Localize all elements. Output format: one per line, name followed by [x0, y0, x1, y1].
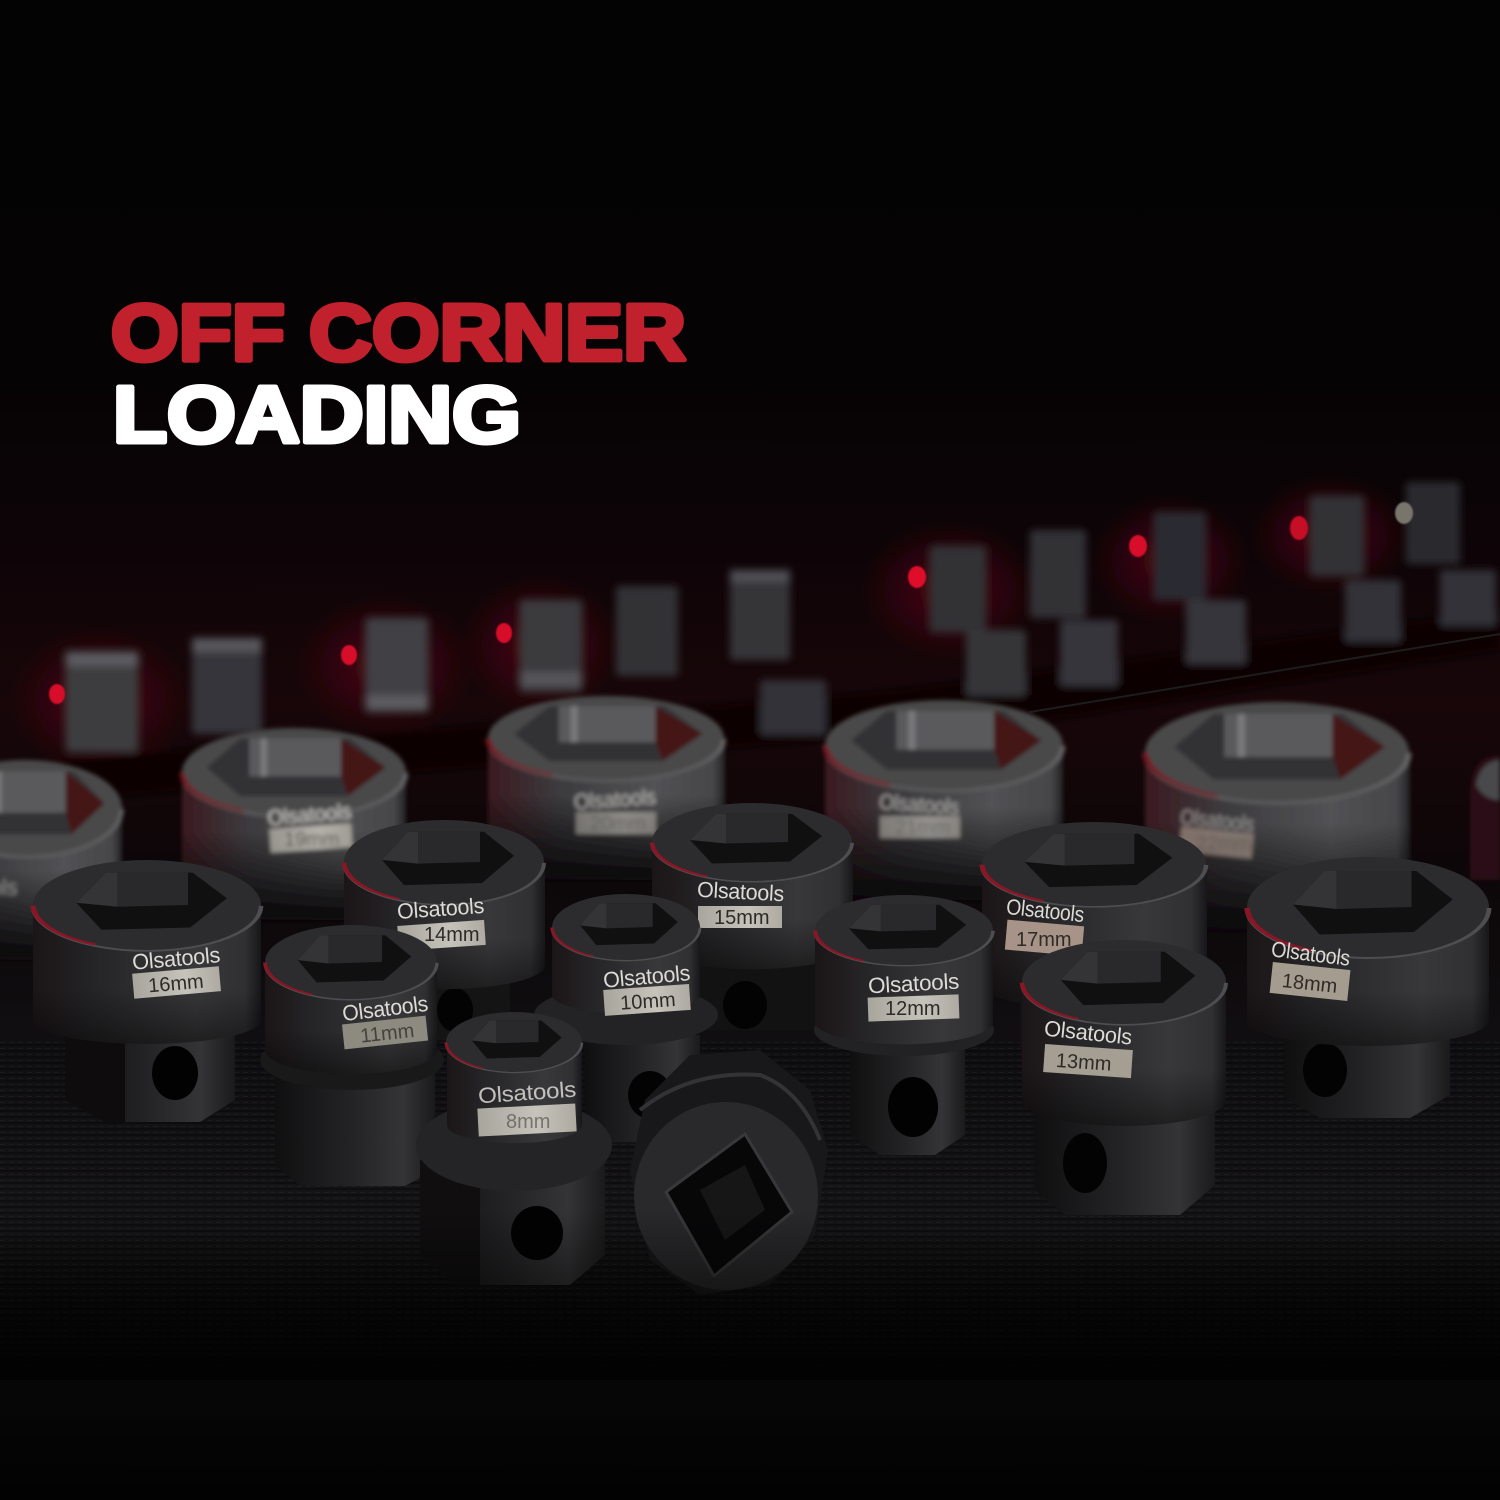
drive face — [634, 1102, 818, 1290]
socket: 15mm: Olsatools — [696, 877, 785, 906]
socket: 8mm — [416, 1012, 612, 1285]
socket: 16mm: Olsatools — [131, 942, 221, 975]
title line: red: OFF CORNER — [111, 288, 686, 377]
socket: 11mm: 11mm — [359, 1020, 415, 1048]
socket: 12mm — [814, 895, 994, 1155]
socket: 14mm: 14mm — [424, 924, 480, 946]
socket: 14mm: Olsatools — [396, 893, 485, 924]
socket: 15mm: 15mm — [714, 907, 770, 929]
blurred row of drive bits on rail — [10, 475, 1500, 800]
socket: 20mm: Olsatools — [573, 784, 657, 815]
socket: 11mm: Olsatools — [341, 991, 430, 1026]
woven table surface — [0, 1040, 1500, 1370]
socket: 17mm: Olsatools — [1005, 894, 1086, 927]
socket: 20mm — [488, 696, 725, 880]
socket: 18mm: Olsatools — [1270, 936, 1352, 971]
socket: 14mm — [344, 820, 545, 1040]
red indicator reflections on bits — [49, 502, 1413, 704]
socket: 13mm: 13mm — [1055, 1050, 1112, 1076]
hole — [511, 1206, 563, 1260]
socket: 22mm: 22mm — [1196, 833, 1252, 855]
socket: front, square drive end — [630, 1050, 828, 1295]
square recess — [666, 1134, 792, 1276]
socket: 8mm: 8mm — [506, 1111, 550, 1133]
drive base — [385, 980, 510, 1040]
socket: 18mm — [1247, 857, 1489, 1118]
shelf edge — [1030, 634, 1500, 712]
socket: 19mm — [182, 728, 406, 920]
socket: 13mm: Olsatools — [1043, 1016, 1133, 1050]
socket: 13mm — [1022, 940, 1226, 1215]
socket: 15mm — [652, 803, 853, 1030]
socket: 16mm: 16mm — [147, 971, 205, 997]
socket: 22mm — [1145, 702, 1410, 930]
socket: 22mm: Olsatools — [1179, 804, 1256, 837]
socket: 17mm: 17mm — [1016, 929, 1072, 951]
socket: 16mm — [33, 860, 261, 1122]
table fade to black — [0, 1210, 1500, 1380]
socket: 11mm — [260, 925, 444, 1186]
socket: 18mm: 18mm — [1281, 970, 1338, 998]
hole — [437, 988, 473, 1032]
socket: 12mm: Olsatools — [867, 969, 960, 998]
socket: 19mm: 19mm — [284, 829, 340, 851]
title line: white: LOADING — [113, 370, 521, 459]
drive base — [65, 1025, 235, 1122]
drive base — [420, 1160, 605, 1285]
socket: 20mm: 20mm — [590, 813, 646, 835]
socket: 21mm: 21mm — [895, 817, 951, 839]
socket: 10mm — [534, 894, 718, 1142]
socket: 10mm: Olsatools — [602, 960, 691, 993]
back row blurred sockets — [0, 696, 1500, 960]
socket: right partial — [1470, 755, 1500, 880]
title — [111, 288, 686, 459]
socket: 17mm — [982, 822, 1207, 1050]
socket: left partial — [0, 760, 122, 960]
socket: 19mm: Olsatools — [266, 798, 353, 831]
socket: 10mm: 10mm — [619, 989, 676, 1015]
socket: 12mm: 12mm — [885, 998, 941, 1020]
socket: 21mm: Olsatools — [878, 789, 960, 820]
hole — [152, 1046, 198, 1100]
flange — [416, 1099, 612, 1191]
socket: 8mm: Olsatools — [477, 1077, 577, 1108]
socket: 21mm — [825, 700, 1063, 900]
